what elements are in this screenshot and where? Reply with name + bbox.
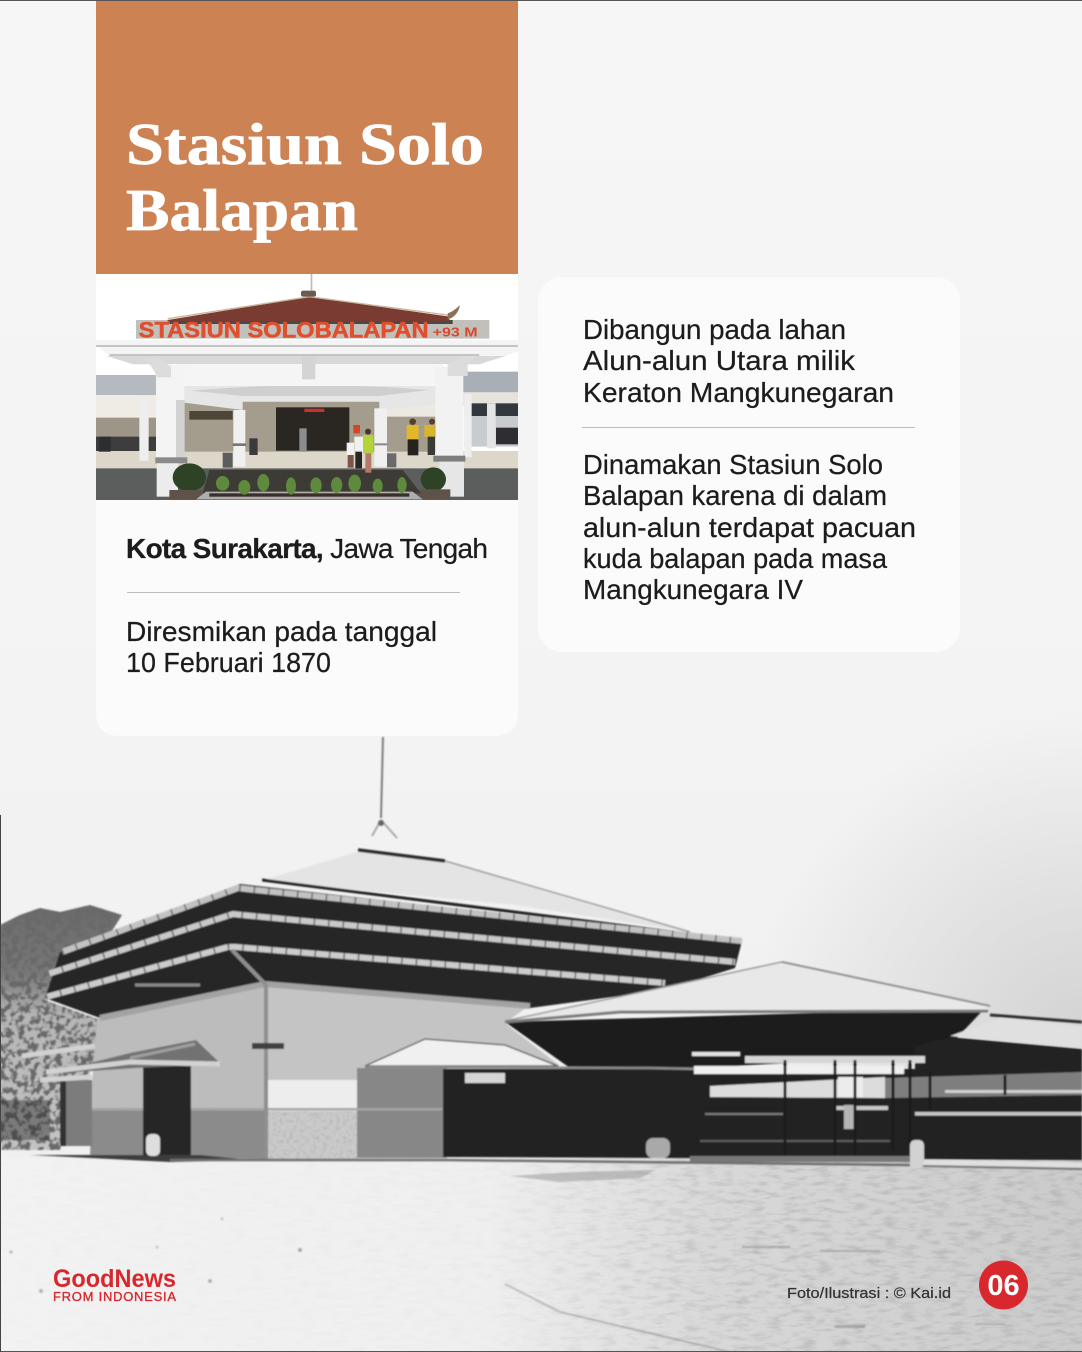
dark platform block	[443, 1069, 1082, 1160]
tree	[0, 900, 130, 1155]
text: land origin: Alun-alun Utara milik	[583, 345, 856, 376]
logo: GoodNews from Indonesia	[53, 1265, 176, 1304]
opening date text	[126, 616, 437, 678]
platform roof	[505, 962, 990, 1021]
text: land origin	[583, 314, 894, 408]
opening date text: Diresmikan pada tanggal	[126, 616, 437, 647]
text: origin of the name: Dinamakan Stasiun Solo	[583, 449, 883, 480]
panel: history of the site and name	[538, 277, 960, 652]
location text: Kota Surakarta, Jawa Tengah	[126, 533, 488, 564]
heading block	[96, 0, 518, 274]
page number badge: 06	[987, 1270, 1020, 1302]
opening date text: 10 Februari 1870	[126, 647, 331, 678]
text: origin of the name: kuda balapan pada masa	[583, 543, 887, 574]
text: origin of the name: alun-alun terdapat pacuan	[583, 512, 916, 543]
text: land origin: Dibangun pada lahan	[583, 314, 846, 345]
historic photo of the station	[0, 710, 1082, 1352]
platform interior	[692, 1052, 740, 1056]
logo: GoodNews from Indonesia: FROM INDONESIA	[53, 1289, 176, 1304]
panel: location and opening date	[96, 0, 518, 736]
ground edge and figures	[30, 1155, 250, 1162]
photo credit: Foto/Ilustrasi : © Kai.id	[787, 1285, 951, 1302]
logo: GoodNews from Indonesia: GoodNews	[53, 1265, 176, 1293]
page number badge	[979, 1260, 1028, 1310]
building walls	[90, 984, 265, 1110]
text: origin of the name: Mangkunegara IV	[583, 574, 803, 605]
station photo: +93 M	[433, 325, 478, 340]
station photo	[96, 274, 518, 500]
station photo: STASIUN SOLOBALAPAN	[139, 318, 429, 343]
heading block: Balapan	[126, 177, 358, 243]
text: origin of the name: Balapan karena di dalam	[583, 480, 887, 511]
heading block: Stasiun Solo	[126, 111, 484, 177]
text: land origin: Keraton Mangkunegaran	[583, 377, 894, 408]
text: origin of the name	[583, 449, 916, 605]
